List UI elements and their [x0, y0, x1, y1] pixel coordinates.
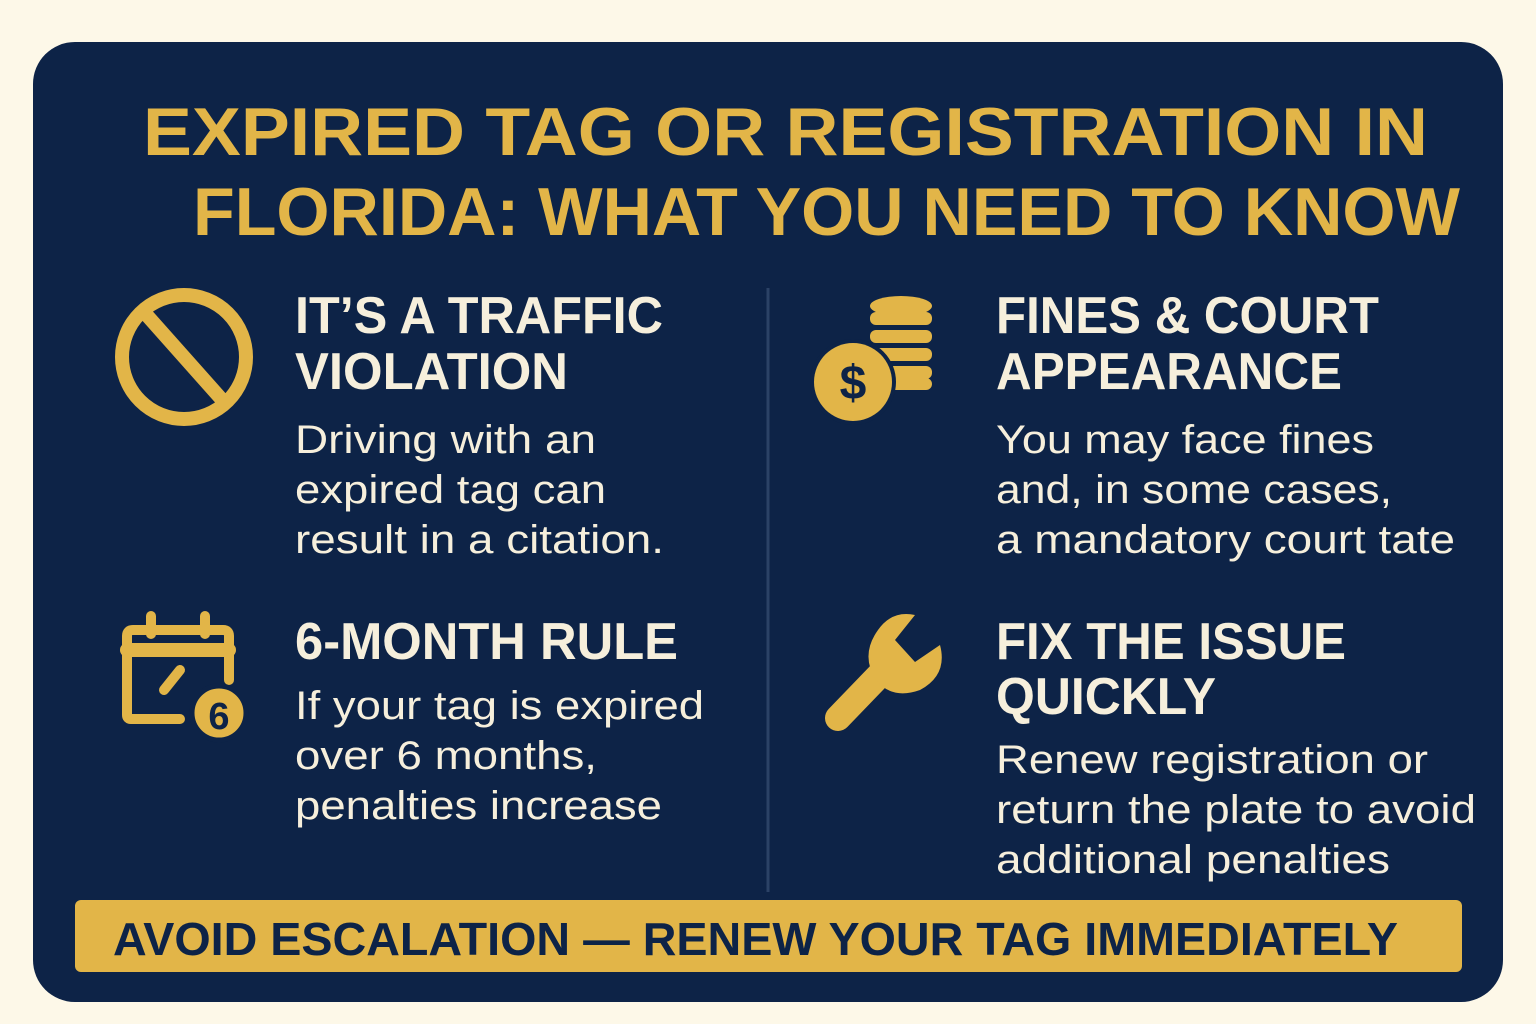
callout: bottom banner — [75, 900, 1462, 972]
callout: bottom banner: AVOID ESCALATION — RENEW YOUR TAG IMMEDIATELY — [113, 913, 1398, 965]
section: fix the issue: QUICKLY — [996, 668, 1216, 726]
section: fix the issue — [996, 613, 1476, 882]
section: fines & court: You may face fines — [996, 418, 1374, 462]
section: traffic violation — [295, 287, 664, 562]
section: traffic violation: VIOLATION — [295, 343, 568, 401]
title: EXPIRED TAG OR REGISTRATION IN — [143, 94, 1428, 170]
section: 6-month rule — [295, 613, 704, 828]
section: fix the issue: Renew registration or — [996, 738, 1428, 782]
icon: prohibition sign — [122, 295, 246, 419]
section: fines & court: a mandatory court tate — [996, 518, 1455, 562]
section: traffic violation: result in a citation. — [295, 518, 664, 562]
title — [143, 94, 1461, 250]
section: 6-month rule: penalties increase — [295, 784, 662, 828]
section: fix the issue: return the plate to avoid — [996, 788, 1476, 832]
icon: calendar: 6 — [208, 696, 230, 738]
section: fix the issue: FIX THE ISSUE — [996, 613, 1346, 671]
section: fines & court: FINES & COURT — [996, 287, 1379, 345]
section: 6-month rule: 6-MONTH RULE — [295, 613, 678, 671]
icon: coins: $ — [840, 357, 867, 410]
section: fines & court: and, in some cases, — [996, 468, 1392, 512]
section: 6-month rule: If your tag is expired — [295, 684, 704, 728]
section: fines & court — [996, 287, 1455, 562]
icon: wrench — [838, 614, 942, 718]
section: 6-month rule: over 6 months, — [295, 734, 597, 778]
section: fines & court: APPEARANCE — [996, 343, 1342, 401]
title: FLORIDA: WHAT YOU NEED TO KNOW — [193, 174, 1461, 250]
section: traffic violation: IT’S A TRAFFIC — [295, 287, 663, 345]
icon: coins — [810, 296, 932, 425]
icon: calendar — [127, 616, 246, 740]
section: traffic violation: expired tag can — [295, 468, 606, 512]
section: traffic violation: Driving with an — [295, 418, 596, 462]
section: fix the issue: additional penalties — [996, 838, 1390, 882]
